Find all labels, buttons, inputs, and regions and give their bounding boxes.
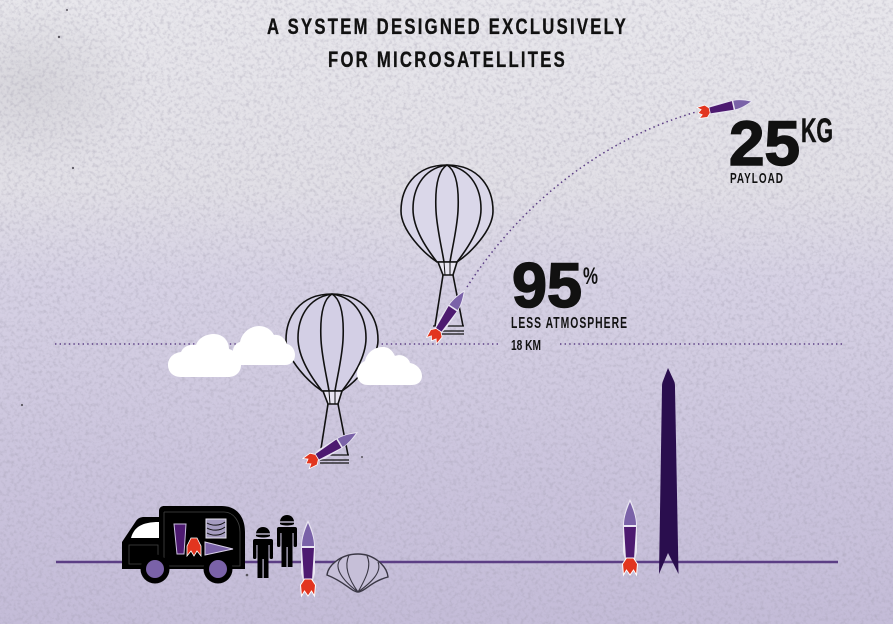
rocket: on lower balloon — [303, 426, 362, 469]
rocket: on upper balloon — [426, 286, 471, 345]
stat: 95% less atmosphere: 95 — [512, 251, 582, 321]
truck cargo: nose cone — [205, 542, 233, 555]
conventional rocket silhouette — [659, 368, 678, 574]
person: front — [253, 527, 273, 578]
truck wheels — [140, 554, 232, 584]
truck cargo: flame — [187, 538, 201, 556]
balloon: lower — [286, 294, 378, 463]
stat: 95% less atmosphere: LESS ATMOSPHERE — [511, 315, 628, 332]
rocket: beside truck — [300, 520, 316, 596]
title: A SYSTEM DESIGNED EXCLUSIVELY — [267, 14, 628, 39]
rocket: in flight — [697, 95, 754, 119]
stat: 95% less atmosphere — [511, 251, 628, 354]
truck outlines — [129, 512, 240, 566]
trajectory dotted arc — [467, 112, 696, 287]
cloud: middle — [233, 326, 295, 365]
deflated balloon — [327, 554, 388, 592]
stat: 25 kg payload — [729, 109, 833, 187]
altitude dotted line — [55, 343, 842, 345]
truck cargo: stacked crate — [206, 519, 226, 538]
ground line — [56, 561, 838, 563]
stat: 25 kg payload: PAYLOAD — [730, 170, 784, 187]
balloon: upper — [401, 165, 493, 334]
truck — [122, 506, 245, 584]
truck window — [131, 522, 159, 538]
truck cargo: rocket body — [174, 524, 186, 554]
person: back — [277, 515, 297, 567]
stat: 25 kg payload: 25 — [729, 109, 800, 179]
rocket: on ground — [622, 499, 638, 575]
title: FOR MICROSATELLITES — [328, 47, 567, 72]
stat: 25 kg payload: KG — [801, 112, 833, 150]
stat: 95% less atmosphere: 18 KM — [511, 337, 541, 354]
cloud: left — [168, 334, 241, 377]
truck body — [122, 506, 245, 569]
clouds — [168, 326, 422, 385]
cloud: right — [357, 347, 422, 385]
title — [267, 14, 628, 72]
stat: 95% less atmosphere: % — [583, 263, 598, 290]
